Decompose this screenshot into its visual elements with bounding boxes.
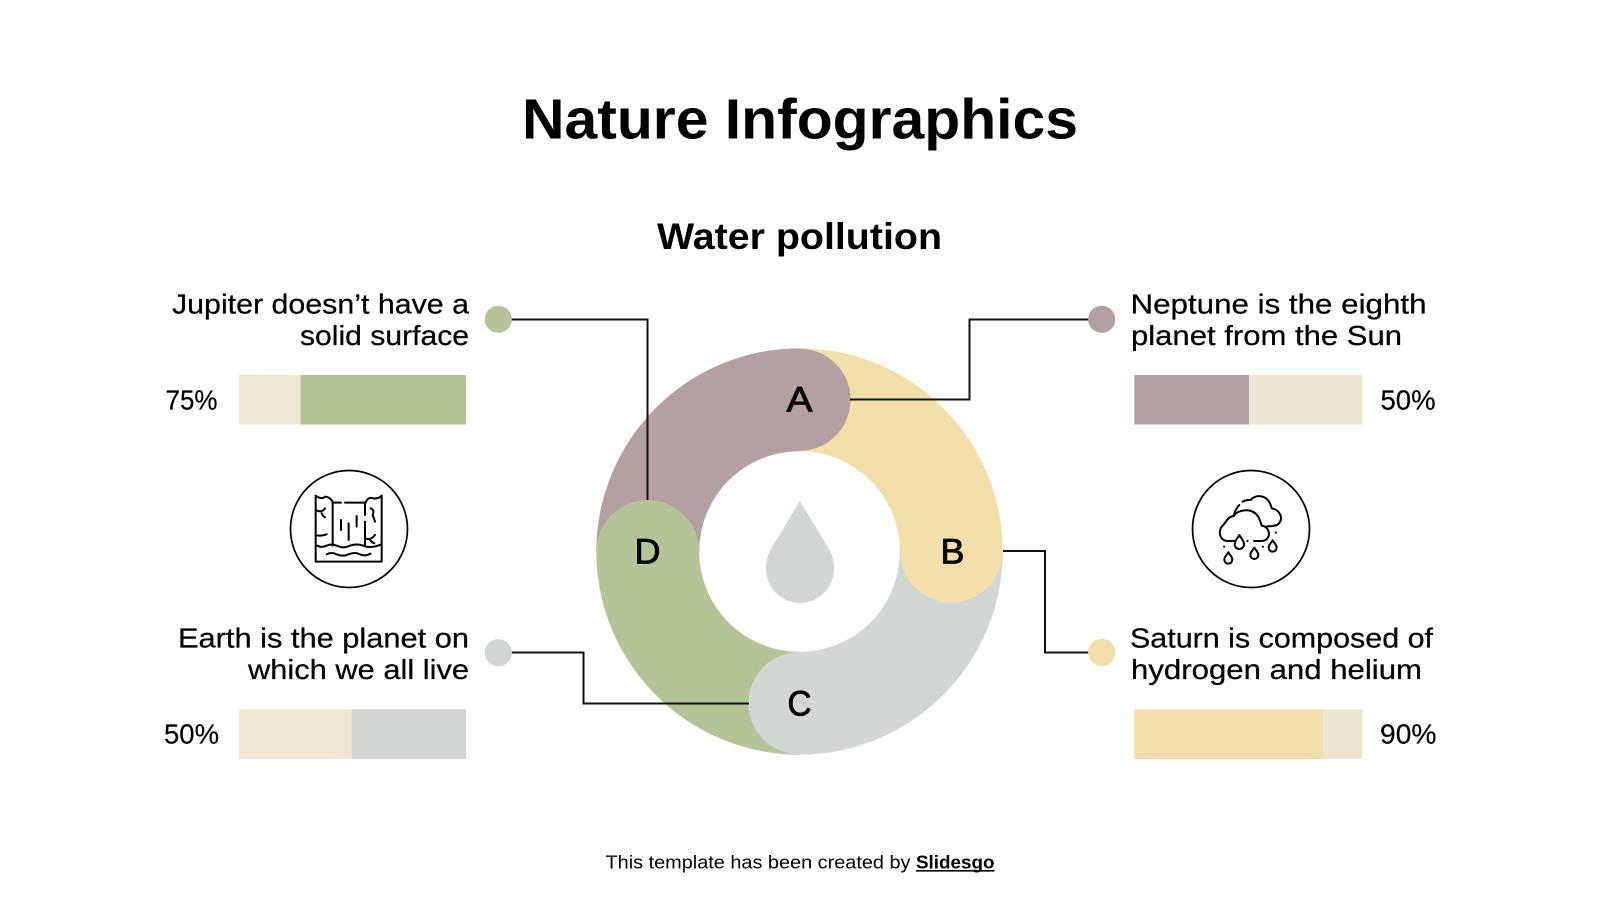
text block: planet from the Sun <box>1131 320 1402 351</box>
progress bar <box>1134 375 1362 424</box>
percentage: 50% <box>164 718 219 749</box>
panel: Saturn <box>1088 622 1436 759</box>
footer credit: This template has been created by <box>606 851 911 872</box>
text block: Earth is the planet on <box>178 622 469 653</box>
title: Nature Infographics <box>522 88 1078 152</box>
marker dot <box>485 639 512 666</box>
connector: A to Neptune <box>850 320 1089 400</box>
icon: water drop <box>766 501 834 603</box>
label B: B <box>940 532 964 571</box>
percentage: 50% <box>1380 384 1436 415</box>
label C: C <box>788 684 812 724</box>
segment B <box>800 348 1002 603</box>
connector: B to Saturn <box>1003 551 1089 652</box>
text block: Neptune is the eighth <box>1130 288 1426 319</box>
percentage: 75% <box>166 384 218 415</box>
progress bar <box>1134 709 1362 759</box>
label D: D <box>634 532 660 571</box>
connector: D to Jupiter <box>511 320 648 500</box>
label A: A <box>786 380 813 420</box>
text block: hydrogen and helium <box>1131 654 1422 685</box>
panel: Jupiter <box>166 288 512 424</box>
segment D <box>596 500 800 754</box>
icon: waterfall <box>290 470 408 588</box>
progress bar <box>239 709 466 759</box>
panel: Earth <box>164 622 512 759</box>
marker dot <box>485 306 512 333</box>
panel: Neptune <box>1088 288 1436 424</box>
text block <box>1130 288 1426 351</box>
text block: Saturn is composed of <box>1130 622 1433 653</box>
text block: solid surface <box>300 320 469 351</box>
marker dot <box>1088 306 1115 333</box>
text block <box>178 622 469 685</box>
segment C <box>748 552 1002 754</box>
percentage: 90% <box>1380 718 1436 749</box>
connector: C to Earth <box>511 652 749 704</box>
donut chart <box>596 348 1002 754</box>
text block <box>172 288 469 351</box>
text block: Jupiter doesn’t have a <box>172 288 469 319</box>
progress bar <box>239 375 466 424</box>
segment A <box>596 348 851 552</box>
text block: which we all live <box>247 654 469 685</box>
text block <box>1130 622 1433 685</box>
icon: rain cloud <box>1192 470 1310 588</box>
subtitle: Water pollution <box>657 216 942 257</box>
marker dot <box>1088 639 1115 666</box>
footer credit: Slidesgo <box>916 851 994 872</box>
